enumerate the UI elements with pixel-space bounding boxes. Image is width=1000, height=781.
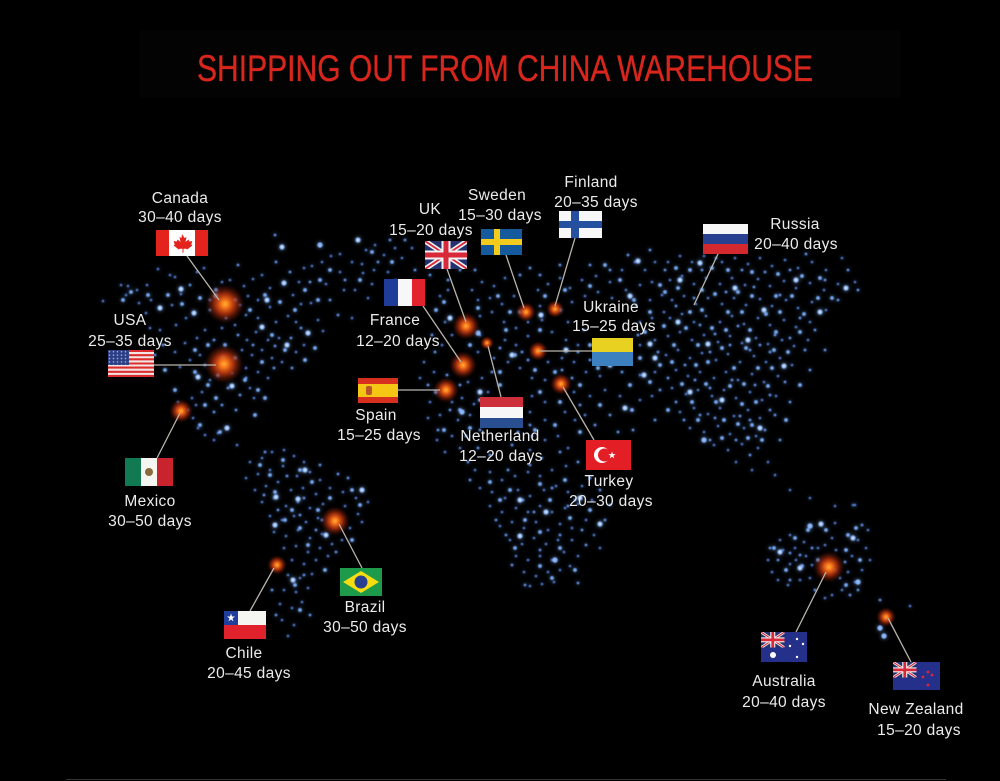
label: Russia: Russia — [770, 216, 820, 233]
flag: Turkey — [586, 440, 631, 470]
flag: Chile — [224, 611, 266, 639]
dots: bright cores — [160, 240, 853, 580]
title band — [140, 30, 900, 98]
flag: Brazil — [340, 568, 382, 596]
label: Canada: 30–40 days — [138, 209, 222, 226]
flag: Spain — [358, 378, 398, 403]
flag: Netherland — [480, 397, 523, 428]
flag: UK — [425, 241, 467, 269]
label: Brazil: Brazil — [345, 599, 385, 616]
label: Netherland — [459, 428, 543, 465]
label: Chile: 20–45 days — [207, 665, 291, 682]
label: Finland: Finland — [564, 174, 618, 191]
label: Australia: 20–40 days — [742, 694, 826, 711]
dots: small — [103, 254, 372, 445]
label: Canada: Canada — [152, 190, 208, 207]
label: Ukraine: Ukraine — [583, 299, 639, 316]
label: Chile — [207, 645, 291, 682]
marker: Canada — [138, 190, 245, 324]
marker: Australia — [742, 551, 845, 711]
label: Netherland: Netherland — [460, 428, 540, 445]
label: Australia — [742, 673, 826, 711]
dots: large — [160, 240, 884, 636]
label: USA: USA — [114, 312, 147, 329]
label: Russia: 20–40 days — [754, 236, 838, 253]
flag: Australia — [761, 632, 807, 662]
marker: Spain — [337, 377, 459, 444]
marker: France — [356, 279, 477, 379]
marker: Netherland — [459, 336, 543, 465]
label: Sweden: 15–30 days — [458, 207, 542, 224]
title: SHIPPING OUT FROM CHINA WAREHOUSE — [197, 48, 813, 89]
label: Brazil: 30–50 days — [323, 619, 407, 636]
label: Chile: Chile — [225, 645, 263, 662]
marker: UK — [389, 201, 480, 340]
label: Mexico — [108, 493, 192, 530]
label: Turkey — [569, 473, 653, 510]
marker: Mexico — [108, 399, 193, 530]
label: USA — [88, 312, 172, 350]
flag: Ukraine — [592, 338, 633, 366]
flag: USA — [108, 350, 154, 377]
marker: Russia — [694, 216, 838, 305]
label: Russia — [754, 216, 838, 253]
label: USA: 25–35 days — [88, 333, 172, 350]
label: UK: 15–20 days — [389, 222, 473, 239]
label: France: 12–20 days — [356, 333, 440, 350]
label: Turkey: Turkey — [585, 473, 633, 490]
marker: Turkey — [550, 373, 653, 510]
bottom rule — [66, 779, 946, 780]
label: Mexico: Mexico — [124, 493, 176, 510]
label: Spain: Spain — [355, 407, 397, 424]
marker: USA — [88, 312, 244, 384]
label: New Zealand: New Zealand — [868, 701, 964, 718]
label: UK — [389, 201, 473, 239]
marker: Finland — [546, 174, 638, 318]
map glow — [103, 235, 910, 636]
dots: medium — [123, 252, 660, 610]
label: Spain: 15–25 days — [337, 427, 421, 444]
marker: Chile — [207, 555, 291, 682]
label: Finland — [554, 174, 638, 211]
label: Sweden — [458, 187, 542, 224]
label: UK: UK — [419, 201, 441, 218]
label: France — [356, 312, 440, 350]
marker: Sweden — [458, 187, 542, 322]
label: Brazil — [323, 599, 407, 636]
flag: Sweden — [481, 229, 522, 255]
label: New Zealand — [868, 701, 964, 739]
label: Sweden: Sweden — [468, 187, 526, 204]
marker: Ukraine — [528, 299, 656, 366]
label: Finland: 20–35 days — [554, 194, 638, 211]
label: Ukraine — [572, 299, 656, 335]
label: Ukraine: 15–25 days — [572, 318, 656, 335]
marker: New Zealand — [868, 607, 964, 739]
label: New Zealand: 15–20 days — [877, 722, 961, 739]
label: Netherland: 12–20 days — [459, 448, 543, 465]
label: France: France — [370, 312, 420, 329]
dots: extra fill — [155, 235, 880, 615]
flag: Canada — [156, 230, 208, 256]
label: Turkey: 20–30 days — [569, 493, 653, 510]
flag: France — [384, 279, 425, 306]
label: Australia: Australia — [752, 673, 816, 690]
flag: Finland — [559, 211, 602, 238]
flag: New Zealand — [893, 662, 940, 690]
flag: Mexico — [125, 458, 173, 486]
flag: Russia — [703, 224, 748, 254]
label: Spain — [337, 407, 421, 444]
label: Canada — [138, 190, 222, 226]
label: Mexico: 30–50 days — [108, 513, 192, 530]
star-dot world map — [103, 235, 910, 636]
marker: Brazil — [320, 506, 407, 636]
